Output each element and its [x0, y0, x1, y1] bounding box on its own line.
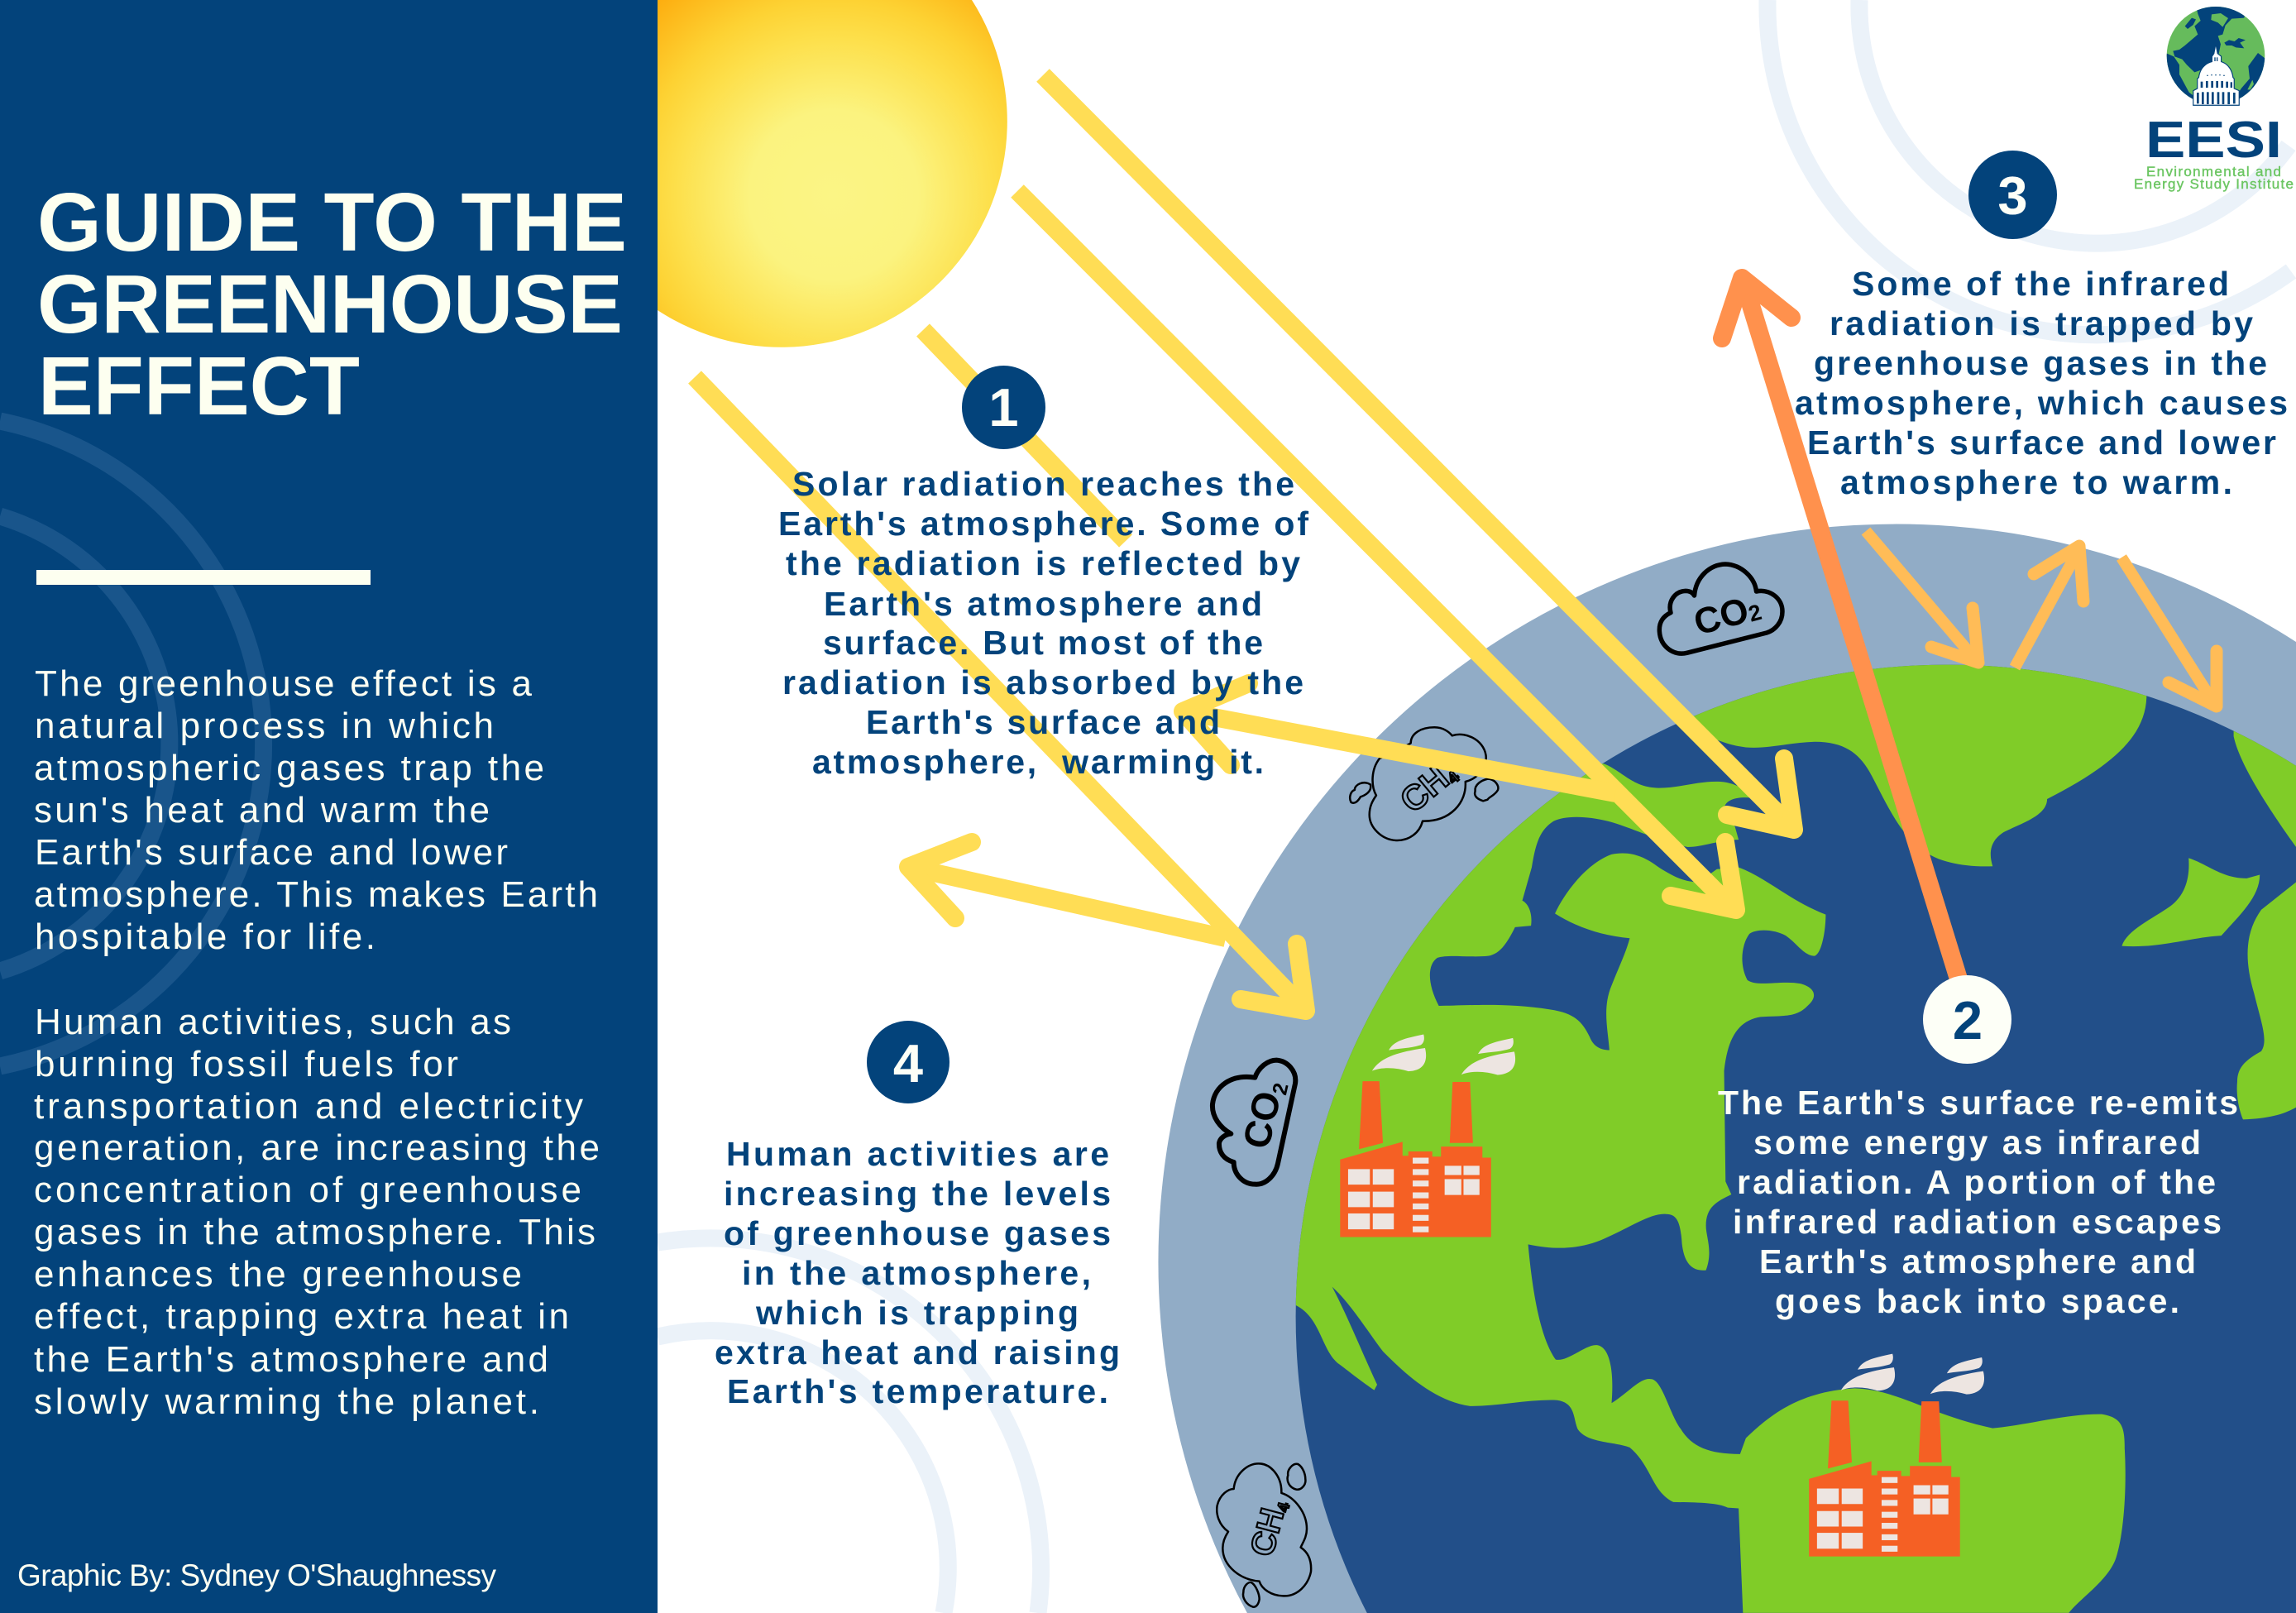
arrow: infrared escaping to space: [1722, 278, 1960, 984]
arrow: reflected ray upper: [1183, 683, 1615, 793]
decorative rings: top right: [1767, 0, 2291, 335]
panel: left sidebar: [0, 0, 658, 1613]
icon: CH4 cloud upper: CH: [1393, 758, 1456, 820]
intro paragraph: atmospheric gases trap the: [34, 748, 544, 788]
text block: step 4: Earth's temperature.: [727, 1372, 1108, 1410]
intro paragraph: atmosphere. This makes Earth: [34, 874, 598, 915]
icon: CH4 cloud lower: CH: [1244, 1505, 1291, 1560]
human activities paragraph: enhances the greenhouse: [34, 1254, 522, 1295]
icon: CO2 cloud left: [1213, 1060, 1295, 1185]
icon: CH4 cloud lower: 4: [1275, 1501, 1294, 1514]
text block: step 2: Earth's atmosphere and: [1759, 1242, 2196, 1280]
arrow: incoming solar ray second: [1017, 191, 1736, 910]
arrow: reflected ray lower: [908, 842, 1226, 938]
title divider bar: [36, 570, 371, 585]
arrow: incoming solar ray far right: [1043, 75, 1794, 830]
intro paragraph: [34, 663, 598, 957]
text block: step 1: [778, 465, 1308, 781]
logo: EESI: [2134, 6, 2294, 192]
text block: step 4: [715, 1135, 1120, 1410]
icon: CO2 cloud left: 2: [1268, 1081, 1294, 1097]
text block: step 4: Human activities are: [726, 1135, 1109, 1173]
text block: step 3: [1795, 265, 2288, 501]
icon: CO2 cloud upper: [1659, 564, 1782, 653]
text block: step 3: Earth's surface and lower: [1807, 424, 2276, 462]
arrow: trapped infrared down A: [1866, 531, 1978, 663]
human activities paragraph: effect, trapping extra heat in: [34, 1296, 569, 1337]
logo tagline: Energy Study Institute: [2134, 176, 2294, 192]
logo tagline: [2134, 164, 2294, 192]
credit line: Graphic By: Sydney O'Shaughnessy: [17, 1558, 496, 1592]
number badge 3: 3: [1997, 165, 2028, 226]
icon: CH4 cloud upper: [1350, 727, 1498, 840]
number badge 2: 2: [1953, 990, 1983, 1051]
number badge 1: 1: [988, 377, 1019, 438]
sun: [658, 0, 1007, 347]
text block: step 4: in the atmosphere,: [742, 1254, 1091, 1292]
text block: step 3: Some of the infrared: [1852, 265, 2229, 303]
icon: CH4 cloud lower: [1217, 1463, 1311, 1607]
human activities paragraph: gases in the atmosphere. This: [34, 1212, 596, 1252]
arrow: trapped infrared up B: [2015, 546, 2083, 668]
intro paragraph: sun's heat and warm the: [34, 790, 490, 830]
number badge 1: [962, 366, 1045, 449]
icon: CO2 cloud upper: CO: [1690, 590, 1753, 644]
human activities paragraph: Human activities, such as: [35, 1002, 511, 1042]
decorative rings: lower centre: [658, 1238, 1041, 1613]
text block: step 3: atmosphere, which causes: [1795, 384, 2288, 422]
text block: step 1: radiation is absorbed by the: [782, 663, 1303, 701]
earth globe: [1295, 665, 2296, 1613]
text block: step 4: increasing the levels: [724, 1175, 1111, 1213]
human activities paragraph: [34, 1002, 600, 1422]
arrow: incoming solar ray left: [695, 377, 1306, 1011]
human activities paragraph: generation, are increasing the: [34, 1127, 600, 1168]
text block: step 1: Earth's surface and: [866, 703, 1220, 741]
number badge 3: [1968, 151, 2057, 239]
icon: factory south america: [1809, 1354, 1984, 1557]
text block: step 4: which is trapping: [755, 1294, 1079, 1332]
intro paragraph: hospitable for life.: [35, 917, 375, 957]
icon: CO2 cloud upper: 2: [1746, 600, 1764, 627]
title: [37, 176, 627, 433]
title: GUIDE TO THE: [37, 176, 627, 269]
text block: step 1: Earth's atmosphere. Some of: [778, 505, 1308, 543]
title: EFFECT: [38, 340, 360, 433]
text block: step 1: the radiation is reflected by: [786, 544, 1300, 582]
text block: step 2: [1718, 1084, 2238, 1320]
intro paragraph: The greenhouse effect is a: [35, 663, 533, 704]
arrow: trapped infrared down C: [2121, 558, 2217, 706]
intro paragraph: natural process in which: [35, 706, 494, 746]
intro paragraph: Earth's surface and lower: [35, 832, 508, 873]
text block: step 2: some energy as infrared: [1753, 1123, 2201, 1161]
text block: step 4: of greenhouse gases: [724, 1214, 1111, 1252]
ocean: [1241, 620, 2296, 1613]
human activities paragraph: slowly warming the planet.: [34, 1381, 539, 1422]
human activities paragraph: transportation and electricity: [34, 1086, 583, 1127]
human activities paragraph: concentration of greenhouse: [34, 1170, 581, 1210]
icon: CO2 cloud left: CO: [1234, 1087, 1289, 1152]
icon: CH4 cloud upper: 4: [1444, 768, 1464, 787]
text block: step 2: radiation. A portion of the: [1737, 1163, 2216, 1201]
title: GREENHOUSE: [37, 258, 623, 351]
icon: globe with capitol: [2164, 6, 2266, 108]
text block: step 3: greenhouse gases in the: [1814, 344, 2267, 382]
text block: step 3: atmosphere to warm.: [1840, 463, 2232, 501]
text block: step 2: The Earth's surface re-emits: [1718, 1084, 2238, 1122]
number badge 2: [1923, 975, 2011, 1064]
atmosphere band: [1158, 524, 2296, 1613]
text block: step 3: radiation is trapped by: [1830, 304, 2253, 342]
text block: step 1: Earth's atmosphere and: [824, 585, 1262, 623]
number badge 4: 4: [893, 1033, 923, 1094]
text block: step 4: extra heat and raising: [715, 1333, 1120, 1371]
text block: step 2: infrared radiation escapes: [1733, 1203, 2222, 1241]
icon: factory north america: [1340, 1034, 1515, 1237]
text block: step 1: surface. But most of the: [823, 624, 1263, 662]
human activities paragraph: the Earth's atmosphere and: [34, 1339, 548, 1380]
text block: step 2: goes back into space.: [1775, 1282, 2179, 1320]
text block: step 1: Solar radiation reaches the: [792, 465, 1294, 503]
human activities paragraph: burning fossil fuels for: [35, 1044, 458, 1084]
continents: [1295, 665, 2296, 1613]
text block: step 1: atmosphere, warming it.: [812, 743, 1264, 781]
logo tagline: Environmental and: [2146, 164, 2281, 179]
number badge 4: [867, 1021, 949, 1103]
logo wordmark: EESI: [2145, 112, 2282, 169]
arrow: short solar ray behind text: [923, 330, 1126, 541]
